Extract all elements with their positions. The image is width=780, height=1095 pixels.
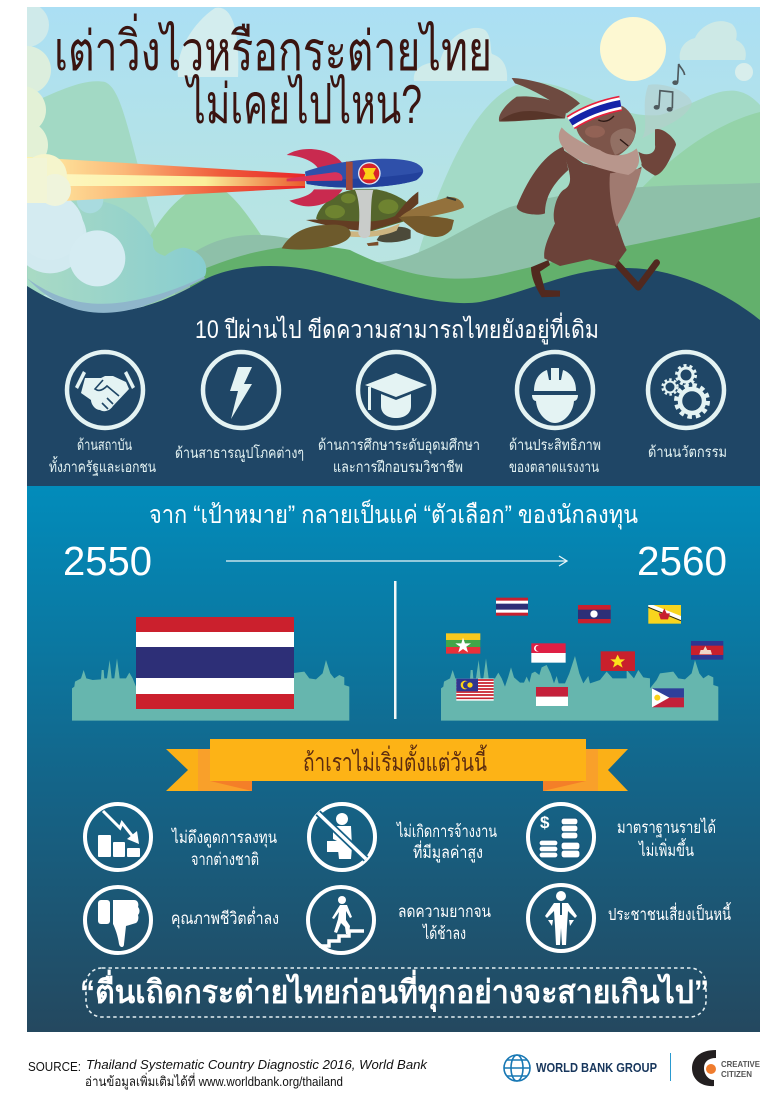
icon: graduation cap bbox=[358, 352, 434, 428]
clouds: left pale column bbox=[27, 7, 51, 158]
flag: Cambodia bbox=[691, 641, 723, 660]
body bbox=[544, 150, 642, 266]
icon: hard hat bbox=[517, 352, 593, 428]
section: teal gradient panel bbox=[27, 486, 760, 1032]
fur collar bbox=[559, 127, 639, 175]
speech bubble bbox=[642, 84, 692, 139]
title: เต่าวิ่งไวหรือกระต่ายไทย bbox=[54, 13, 492, 82]
flag: Laos bbox=[578, 605, 611, 623]
call to action text: “ตื่นเถิดกระต่ายไทยก่อนที่ทุกอย่างจะสายเกินไป” bbox=[80, 969, 709, 1013]
cloud: behind title right bbox=[414, 28, 507, 81]
icon: falling investment bbox=[85, 804, 151, 870]
hill: far right bbox=[418, 82, 760, 252]
text: poverty reduction bbox=[398, 902, 491, 943]
text: no high value jobs: ที่มีมูลค่าสูง bbox=[413, 840, 483, 863]
flag: Philippines bbox=[652, 688, 684, 707]
icon: coins bbox=[528, 804, 594, 870]
logo: World Bank Group bbox=[504, 1055, 657, 1081]
logo: World Bank Group: WORLD BANK GROUP bbox=[536, 1061, 657, 1075]
ASEAN flags bbox=[446, 598, 723, 707]
labels: capacity areas: ด้านสถาบัน bbox=[77, 437, 132, 454]
arrow: timeline bbox=[226, 556, 567, 566]
flag: Indonesia bbox=[536, 687, 568, 706]
labels: capacity areas: ด้านประสิทธิภาพ bbox=[509, 437, 601, 454]
logo: Creative Citizen: CREATIVE bbox=[721, 1059, 760, 1069]
icon: handshake bbox=[67, 352, 143, 428]
title bbox=[57, 14, 489, 124]
ribbon text: ถ้าเราไม่เริ่มตั้งแต่วันนี้ bbox=[303, 744, 487, 777]
text: quality of life: คุณภาพชีวิตต่ำลง bbox=[171, 906, 279, 929]
source block: Thailand Systematic Country Diagnostic 2016, World Bank bbox=[86, 1057, 429, 1072]
flag: Brunei bbox=[648, 605, 681, 624]
hill: mid left bbox=[144, 192, 261, 306]
logo: Creative Citizen bbox=[692, 1050, 760, 1086]
section: navy capacity panel bbox=[49, 312, 727, 476]
text: debt risk: ประชาชนเสี่ยงเป็นหนี้ bbox=[608, 902, 731, 924]
panel: illustrated hero scene bbox=[0, 3, 760, 486]
year 2560: 2560 bbox=[637, 538, 727, 584]
hill: far left bbox=[27, 81, 165, 300]
sun bbox=[600, 17, 666, 81]
skyline: right bbox=[441, 656, 718, 721]
turtle bbox=[282, 189, 464, 250]
head bbox=[576, 105, 636, 158]
flag: Thailand bbox=[496, 598, 528, 616]
big Thai flag bbox=[136, 617, 294, 709]
labels: capacity areas bbox=[49, 437, 727, 476]
music notes bbox=[654, 64, 685, 112]
flag: Singapore bbox=[531, 643, 566, 663]
icon: no skilled jobs bbox=[309, 804, 375, 870]
logo: Creative Citizen: CITIZEN bbox=[721, 1069, 752, 1079]
ears bbox=[512, 78, 580, 113]
cloud: small round bbox=[735, 63, 753, 81]
icon: coins: $ bbox=[540, 813, 550, 832]
title: ไม่เคยไปไหน? bbox=[184, 73, 422, 135]
text: poverty reduction: ลดความยากจน bbox=[398, 902, 491, 921]
arms bbox=[517, 147, 568, 215]
labels: capacity areas: ด้านการศึกษาระดับอุดมศึกษา bbox=[318, 437, 480, 455]
labels: capacity areas: ทั้งภาครัฐและเอกชน bbox=[49, 456, 156, 476]
headband bbox=[571, 103, 621, 123]
skyline: left bbox=[72, 656, 349, 721]
icon: man walking down stairs bbox=[308, 887, 374, 953]
text: income standards bbox=[617, 817, 716, 860]
ribbon banner bbox=[166, 739, 628, 791]
flag: Vietnam bbox=[601, 651, 635, 671]
icon: lightning bolt bbox=[203, 352, 279, 428]
text: income standards: ไม่เพิ่มขึ้น bbox=[637, 838, 694, 860]
flag: Malaysia bbox=[456, 679, 494, 701]
source block bbox=[28, 1057, 429, 1090]
text: income standards: มาตราฐานรายได้ bbox=[617, 817, 716, 838]
heading: capacity: 10 ปีผ่านไป ขีดความสามารถไทยยังอยู่ที่เดิม bbox=[195, 312, 599, 345]
year 2550: 2550 bbox=[63, 538, 152, 584]
logo divider bbox=[670, 1053, 671, 1081]
text: no foreign investment: ไม่ดึงดูดการลงทุน bbox=[170, 827, 277, 848]
divider bbox=[394, 581, 396, 719]
icon: man with empty pockets bbox=[528, 885, 594, 951]
source block: อ่านข้อมูลเพิ่มเติมได้ที่ www.worldbank.org/thailand bbox=[85, 1073, 343, 1090]
rocket flames bbox=[23, 154, 305, 206]
labels: capacity areas: ด้านสาธารณูปโภคต่างๆ bbox=[175, 444, 304, 462]
labels: capacity areas: และการฝึกอบรมวิชาชีพ bbox=[333, 459, 463, 476]
call to action dashed box bbox=[80, 968, 709, 1017]
cloud: top right bbox=[680, 21, 746, 60]
text: poverty reduction: ได้ช้าลง bbox=[422, 923, 466, 943]
hill: grey green bbox=[175, 183, 760, 295]
hill: mid right bbox=[643, 112, 760, 187]
text: no foreign investment bbox=[170, 827, 277, 869]
navy wave bbox=[27, 266, 760, 486]
labels: capacity areas: ด้านนวัตกรรม bbox=[648, 444, 727, 461]
rabbit bbox=[499, 64, 692, 297]
text: no high value jobs: ไม่เกิดการจ้างงาน bbox=[395, 821, 497, 841]
rocket bbox=[287, 149, 423, 238]
legs bbox=[531, 260, 560, 297]
source block: SOURCE: bbox=[28, 1059, 81, 1074]
cloud: behind title left bbox=[178, 8, 238, 77]
heading: target to option: จาก “เป้าหมาย” กลายเป็นแค่ “ตัวเลือก” ของนักลงทุน bbox=[149, 499, 638, 530]
clouds: left lower cluster bbox=[27, 199, 206, 313]
text: no high value jobs bbox=[395, 821, 497, 863]
icon: thumbs down bbox=[85, 887, 151, 953]
labels: capacity areas: ของตลาดแรงงาน bbox=[509, 459, 599, 476]
hill: front green bbox=[190, 217, 760, 330]
icon: gears bbox=[648, 352, 724, 428]
text: no foreign investment: จากต่างชาติ bbox=[191, 850, 259, 869]
flag: Myanmar bbox=[446, 633, 480, 654]
